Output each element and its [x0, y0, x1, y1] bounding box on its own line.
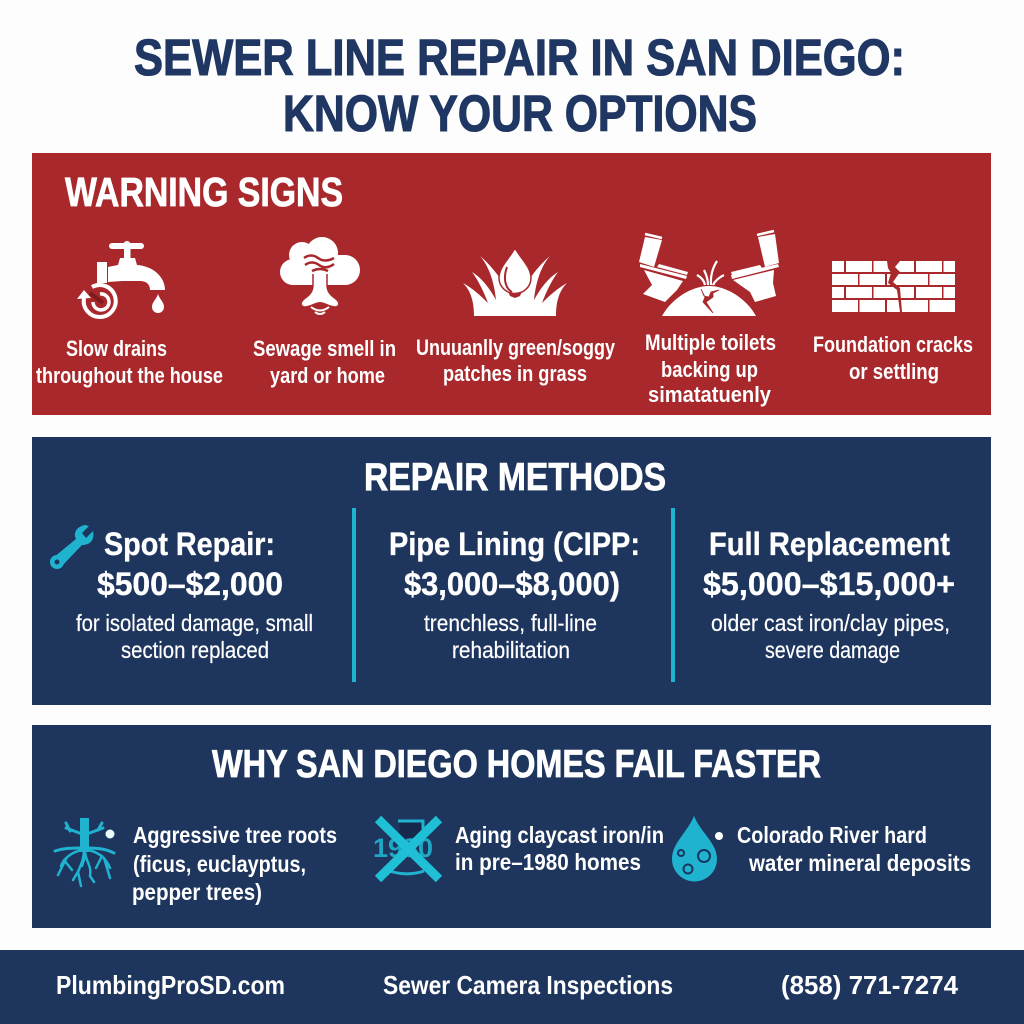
icon: slow faucet	[77, 241, 165, 317]
warning labels: Slow drains	[66, 336, 167, 361]
icon: wrench	[50, 525, 93, 569]
method: pipe lining: trenchless, full-line	[424, 610, 597, 636]
reason: tree roots: pepper trees)	[132, 879, 262, 905]
icon: toilets backing up over cracked mound	[639, 231, 779, 316]
footer bar: (858) 771-7274	[781, 970, 959, 1000]
method: spot repair	[76, 526, 313, 663]
warning labels: Sewage smell in	[253, 336, 396, 361]
panel: warning signs	[32, 153, 991, 415]
reason: tree roots: (ficus, euclayptus,	[133, 851, 306, 877]
method: spot repair: for isolated damage, small	[76, 610, 313, 636]
warning labels: simatatuenly	[648, 382, 772, 407]
heading: warning signs: WARNING SIGNS	[65, 169, 343, 215]
warning labels: or settling	[849, 359, 939, 384]
reason: hard water: water mineral deposits	[748, 850, 971, 876]
footer bar: Sewer Camera Inspections	[383, 970, 673, 1000]
title: SEWER LINE REPAIR IN SAN DIEGO:	[134, 29, 905, 86]
panel: repair methods	[32, 437, 991, 705]
heading: repair methods: REPAIR METHODS	[364, 456, 666, 499]
footer bar: PlumbingProSD.com	[56, 970, 285, 1000]
warning labels: Unuuanlly green/soggy	[416, 335, 616, 360]
method: full replacement: older cast iron/clay pipes,	[711, 610, 950, 636]
method: full replacement: $5,000–$15,000+	[703, 566, 955, 602]
warning labels: Multiple toilets	[645, 330, 776, 355]
icon: crossed out 1980: 1980	[373, 833, 433, 863]
bullet	[715, 832, 723, 840]
reason: aging pipes	[455, 822, 664, 875]
warning labels	[36, 330, 973, 407]
method: spot repair: Spot Repair:	[104, 526, 275, 562]
reason: hard water	[737, 822, 971, 876]
reason: aging pipes: Aging claycast iron/in	[455, 822, 664, 848]
panel: why san diego homes fail faster	[32, 725, 991, 928]
heading: why homes fail: WHY SAN DIEGO HOMES FAIL FASTER	[212, 743, 821, 786]
method: pipe lining: $3,000–$8,000)	[404, 566, 620, 602]
title	[134, 29, 905, 142]
icon: cracked brick wall	[832, 261, 955, 312]
method: full replacement: Full Replacement	[709, 526, 950, 562]
warning labels: backing up	[661, 357, 758, 382]
reason: tree roots	[132, 822, 337, 905]
warning labels: patches in grass	[443, 361, 587, 386]
reason: hard water: Colorado River hard	[737, 822, 927, 848]
icon: soggy grass with drop	[463, 248, 567, 316]
warning labels: yard or home	[270, 363, 385, 388]
method: pipe lining: Pipe Lining (CIPP:	[389, 526, 640, 562]
method: spot repair: section replaced	[121, 637, 269, 663]
method: spot repair: $500–$2,000	[97, 566, 283, 602]
title: KNOW YOUR OPTIONS	[283, 85, 757, 142]
icon: crossed out 1980	[373, 819, 439, 879]
method: full replacement: severe damage	[765, 637, 900, 663]
reason: aging pipes: in pre–1980 homes	[455, 849, 641, 875]
footer bar	[0, 950, 1024, 1024]
icon: hard water drop	[672, 816, 717, 882]
bullet	[106, 830, 114, 838]
method: pipe lining	[389, 526, 640, 663]
icon: sewage smell cloud and nose	[280, 237, 360, 314]
warning labels: throughout the house	[36, 363, 223, 388]
icon: tree roots	[55, 818, 114, 886]
reason: tree roots: Aggressive tree roots	[133, 822, 337, 848]
warning labels: Foundation cracks	[813, 332, 973, 357]
method: full replacement	[703, 526, 955, 663]
method: pipe lining: rehabilitation	[452, 637, 570, 663]
